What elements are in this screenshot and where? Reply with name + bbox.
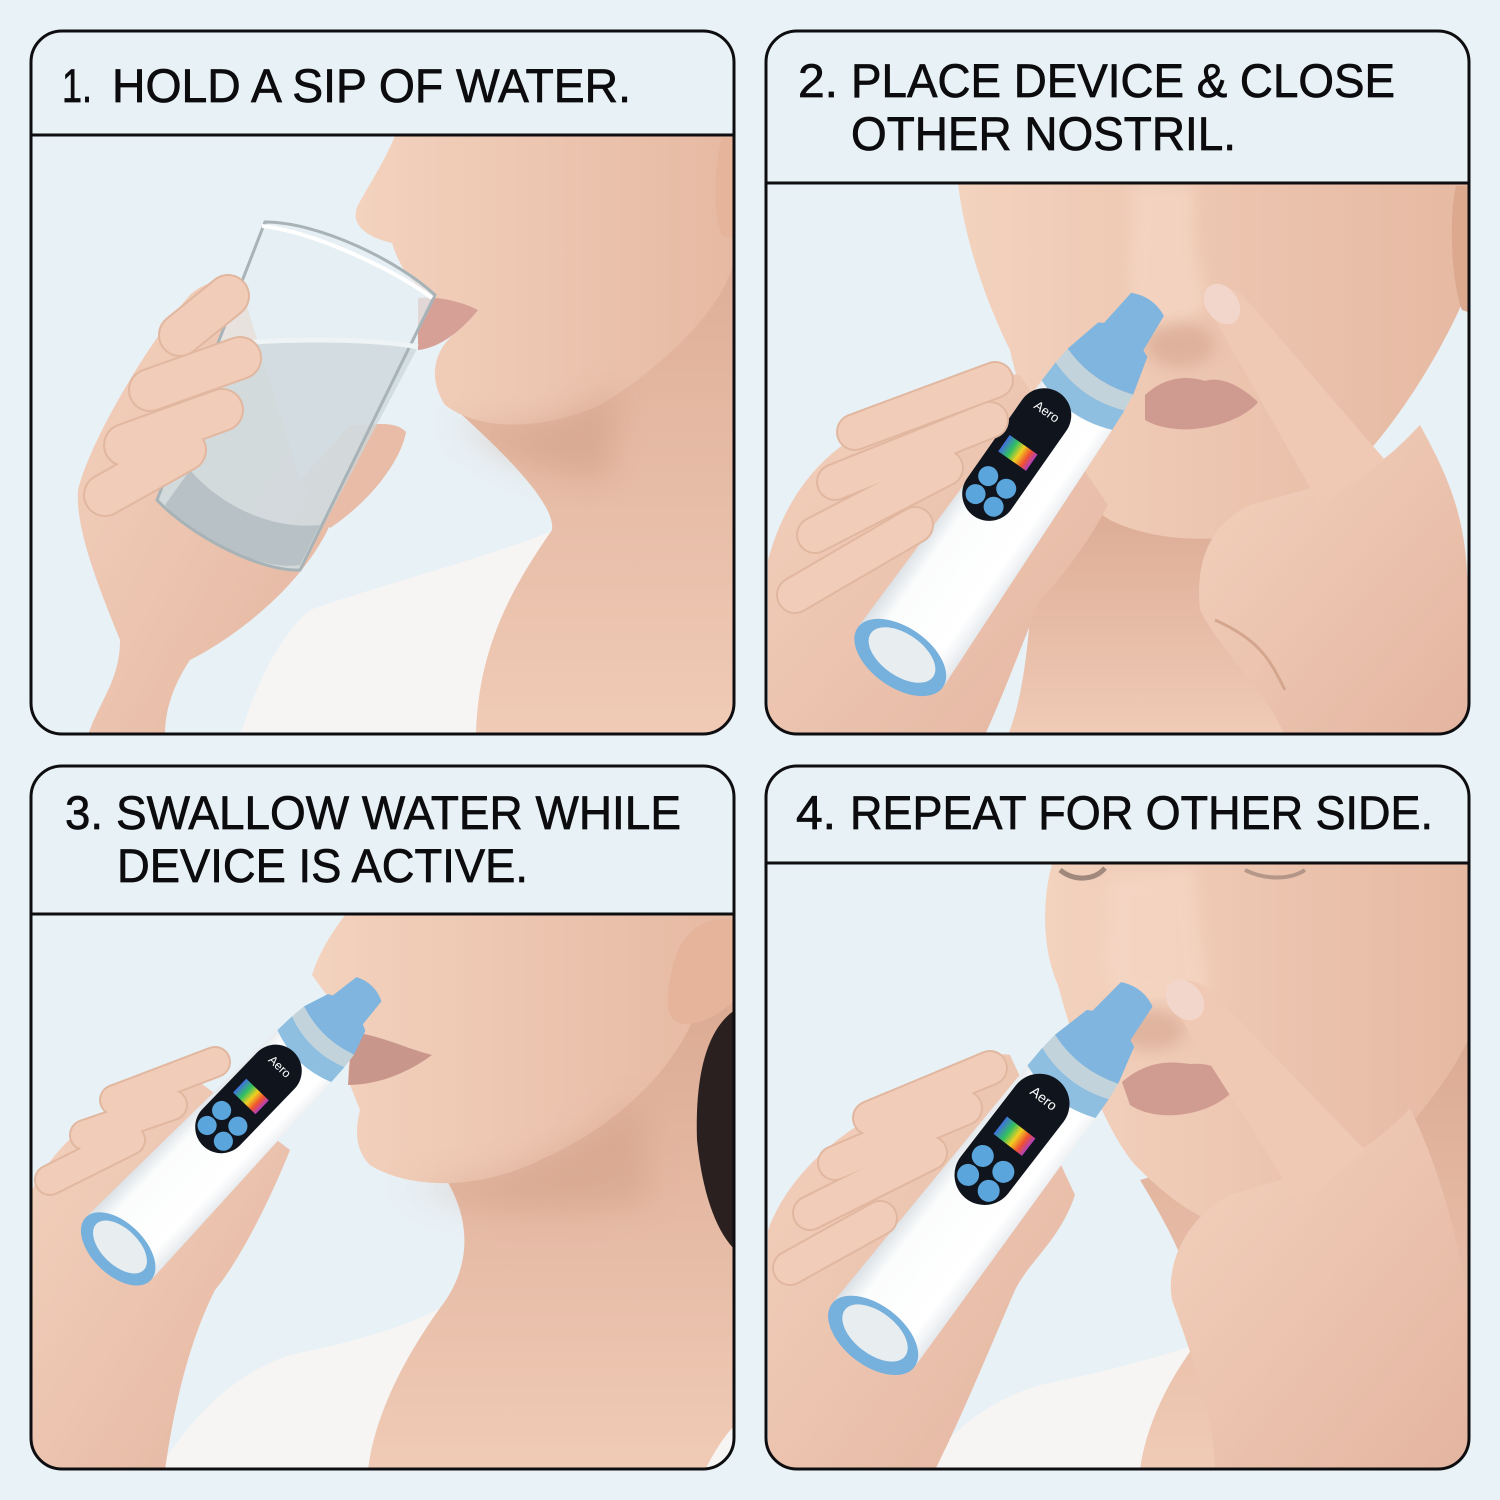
device [80, 977, 382, 1286]
under nose shadow [1145, 323, 1215, 367]
neck and chest [368, 1000, 735, 1470]
lips [1145, 378, 1258, 429]
header: step 2: OTHER NOSTRIL. [851, 107, 1236, 160]
hand [78, 281, 330, 735]
jaw shadow [428, 1122, 642, 1214]
jaw shadow [466, 398, 616, 479]
under nose shadow [1115, 1010, 1185, 1050]
control panel [942, 1062, 1082, 1217]
header: step 3 [65, 786, 681, 892]
control panel: Aero [1031, 398, 1062, 426]
nose highlight [1103, 865, 1210, 1001]
ear [716, 145, 721, 230]
head profile [312, 915, 735, 1183]
shirt [925, 1345, 1195, 1470]
photo: device in other nostril [768, 864, 1468, 1470]
left hand behind device [768, 374, 1108, 735]
control panel [962, 388, 1072, 521]
header: step 4: 4. [796, 786, 836, 839]
nose highlight [1132, 186, 1204, 322]
shirt [240, 530, 555, 735]
right hand closing nostril [1158, 972, 1468, 1470]
header: step 1: 1. [62, 59, 92, 112]
photo: device in left nostril [768, 184, 1468, 735]
header: step 2: PLACE DEVICE & CLOSE [851, 54, 1395, 107]
ear [668, 919, 735, 1024]
header: step 3: DEVICE IS ACTIVE. [117, 839, 528, 892]
header: step 4: REPEAT FOR OTHER SIDE. [850, 786, 1433, 839]
panel: step 2 place device and close other nostril [766, 31, 1469, 735]
left hand behind device [768, 1054, 1075, 1470]
lips [1122, 1062, 1240, 1115]
device [854, 292, 1164, 696]
thumb behind glass [326, 424, 406, 528]
neck and chest [462, 267, 732, 732]
header: step 1: HOLD A SIP OF WATER. [112, 59, 631, 112]
lips [418, 298, 478, 350]
panel: step 3 swallow water while device is active [31, 766, 735, 1470]
panel: step 4 repeat for other side [766, 766, 1469, 1470]
face [1045, 864, 1468, 1231]
header: step 3: SWALLOW WATER WHILE [116, 786, 681, 839]
hand [32, 1075, 290, 1470]
photo: woman drinking water [78, 136, 735, 735]
neck [1009, 515, 1284, 732]
header: step 2: 2. [798, 54, 838, 107]
hair [697, 1010, 735, 1250]
control panel: Aero [1027, 1083, 1061, 1114]
lips [348, 1032, 432, 1085]
shirt [158, 1308, 440, 1470]
head profile [356, 136, 735, 425]
fingers on device [795, 380, 995, 595]
header: step 3: 3. [65, 786, 103, 839]
fingers on device [50, 1062, 215, 1180]
photo: profile with device [32, 915, 735, 1470]
fingers on device [790, 1068, 990, 1268]
panel: step 1 hold a sip of water [31, 31, 735, 735]
device [814, 959, 1181, 1391]
fingers on glass [105, 296, 240, 495]
header: step 2 [798, 54, 1395, 160]
right hand closing nostril [1196, 277, 1468, 735]
control panel [195, 1044, 302, 1154]
eye hints [1060, 868, 1105, 878]
glass [157, 222, 435, 570]
face [958, 184, 1468, 539]
control panel: Aero [266, 1053, 294, 1081]
ear [1452, 186, 1468, 312]
